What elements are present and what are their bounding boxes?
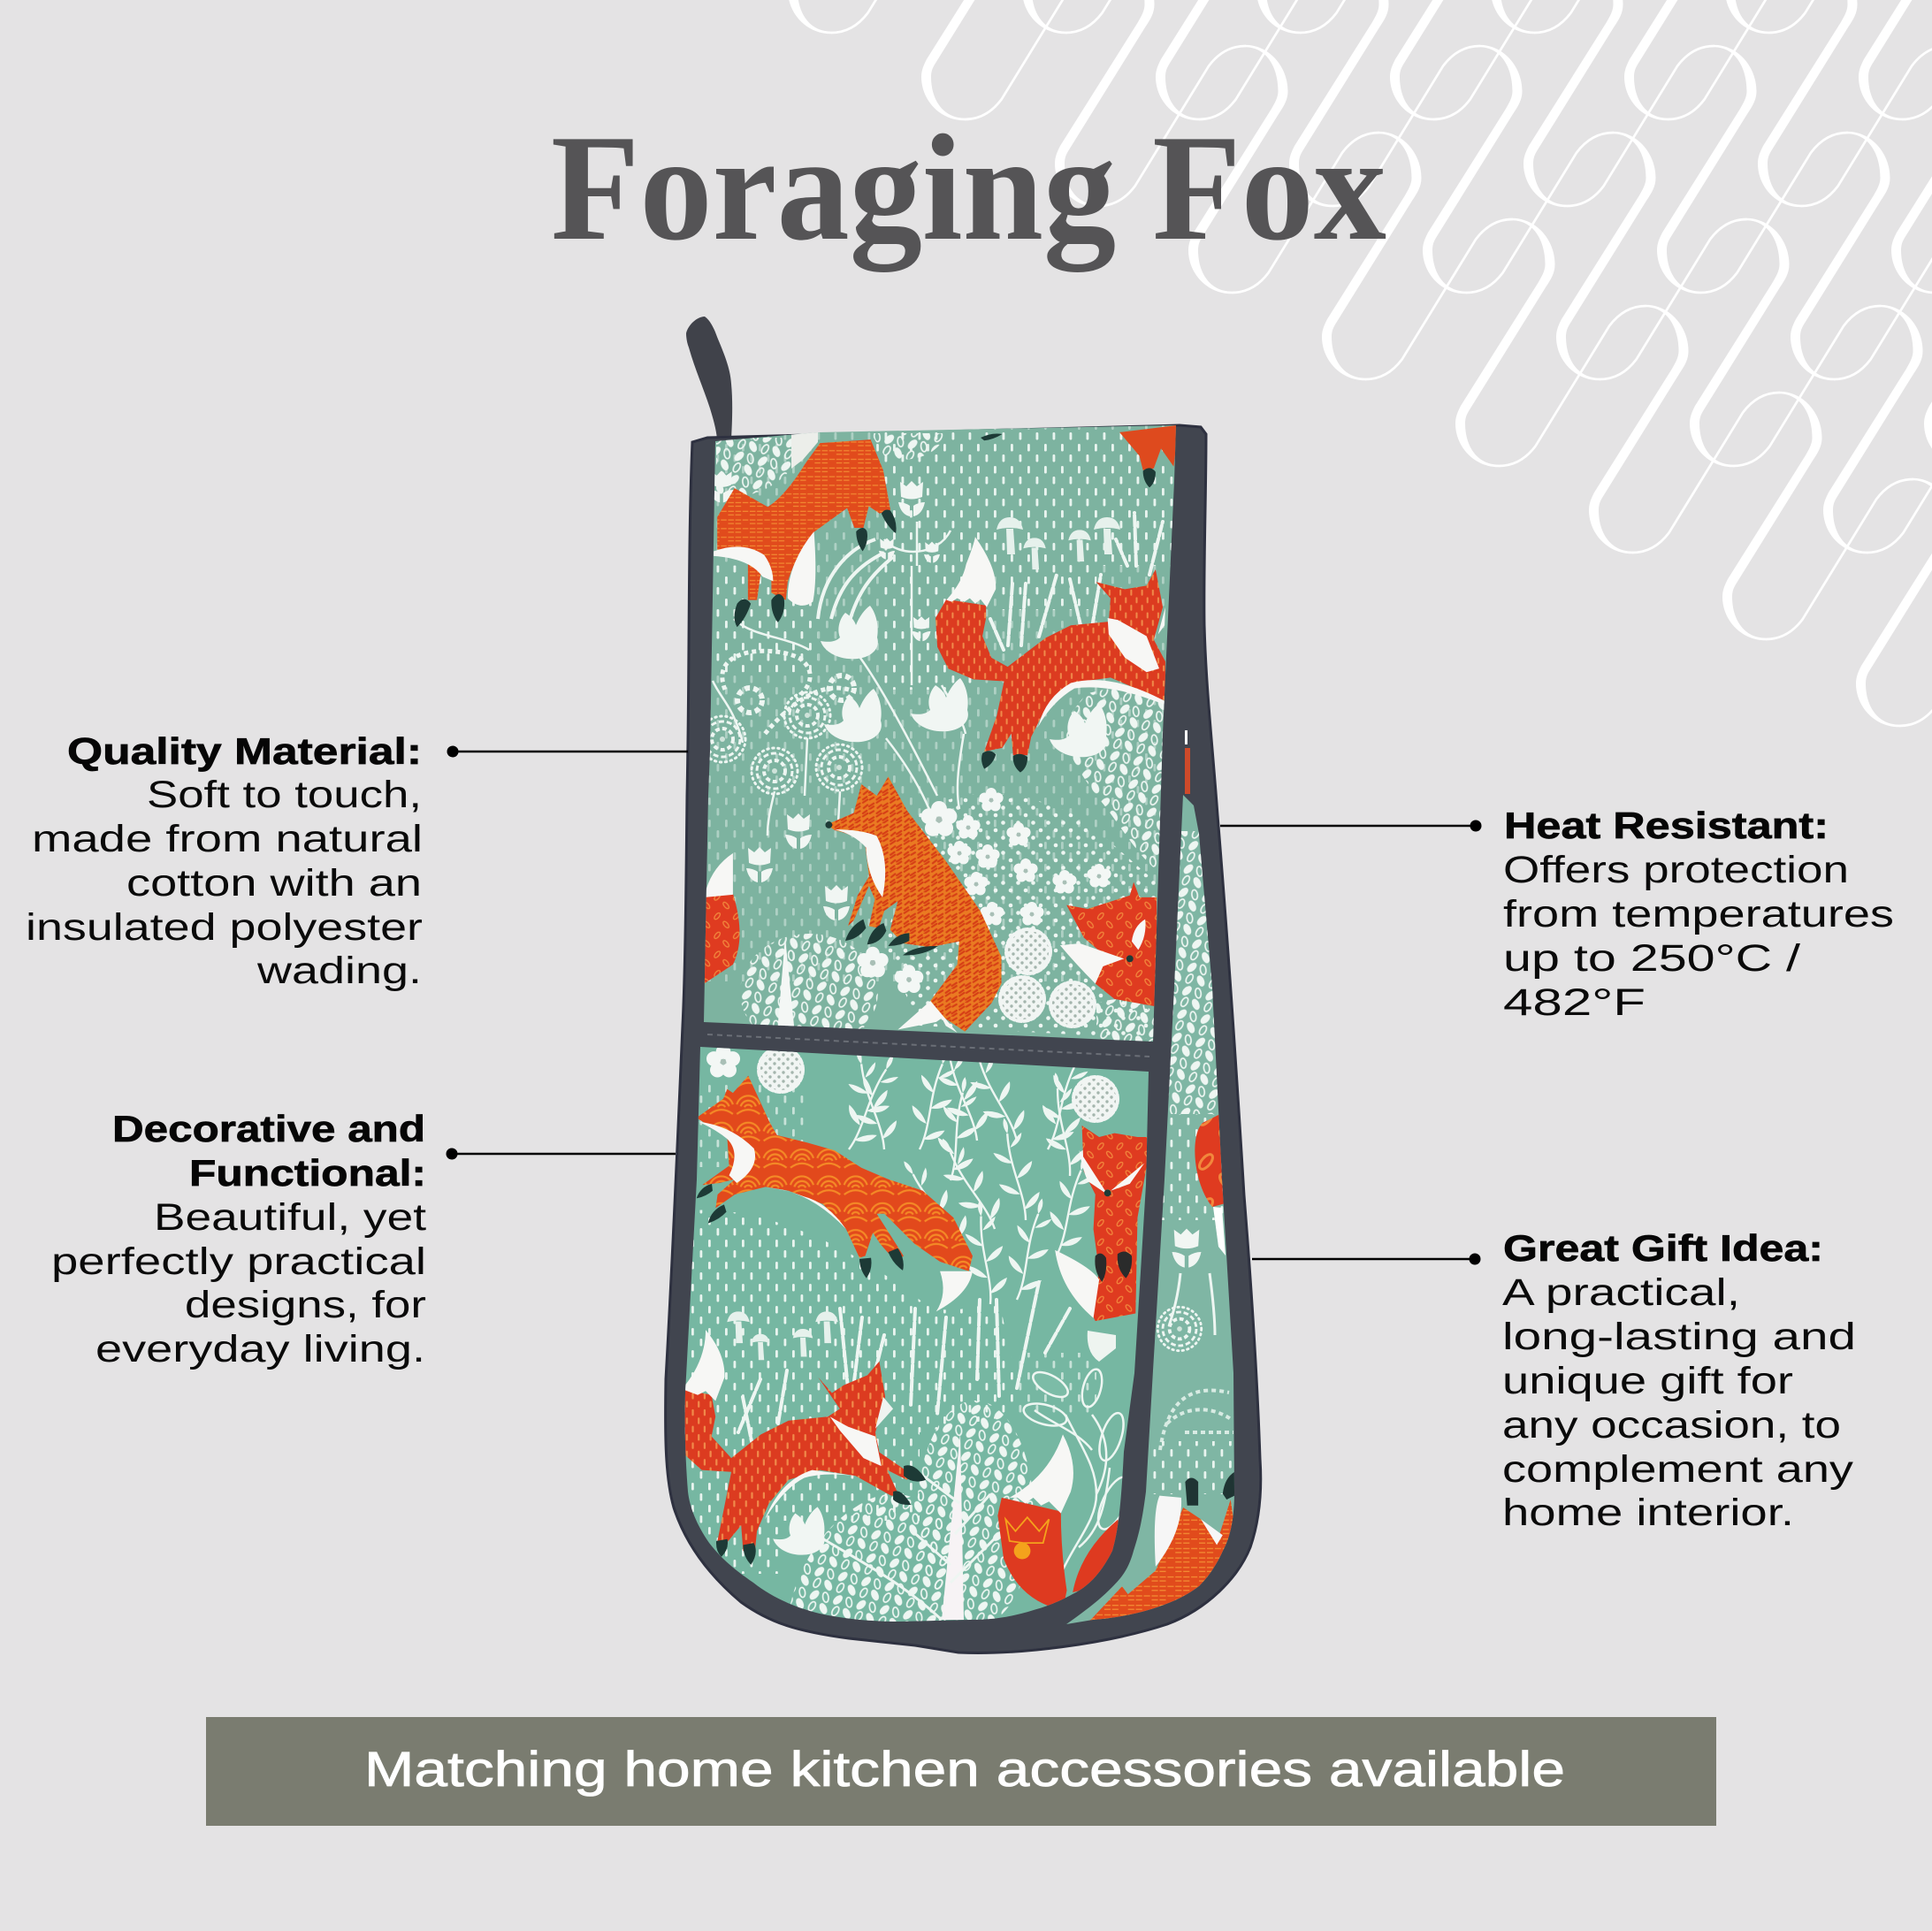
- text block: designs, for: [185, 1284, 426, 1326]
- dot texture behind daisies: [884, 794, 1158, 1039]
- dash texture: upper meadow: [875, 429, 1180, 610]
- background pattern: white paperclip loops: [788, 0, 1932, 727]
- tree: [787, 1401, 1034, 1627]
- stems: [713, 522, 966, 836]
- text block: [1502, 1227, 1856, 1534]
- strip fabric: [1066, 795, 1234, 1624]
- text block: cotton with an: [126, 862, 422, 904]
- leaf cluster bottom right: [871, 433, 1167, 1048]
- text block: any occasion, to: [1502, 1404, 1841, 1446]
- fox: curled asleep: [1060, 882, 1157, 1007]
- tree canopy right: [917, 1401, 1034, 1627]
- callout: heat resistant: [1220, 805, 1894, 1024]
- strip tulip: [1172, 1229, 1201, 1268]
- leader line: [1220, 820, 1482, 831]
- mushrooms lower: [727, 1311, 838, 1360]
- callout: great gift idea: [1252, 1227, 1856, 1534]
- leader line: [446, 1148, 676, 1160]
- upper panel fabric: [690, 416, 1185, 1052]
- title: Foraging Fox: [551, 104, 1386, 272]
- fox: leaping swirl: [697, 1076, 973, 1311]
- pompoms lower: [706, 1044, 1118, 1121]
- strip dashes: [1162, 1114, 1224, 1220]
- stitching on binding: [707, 1034, 1149, 1057]
- text block: home interior.: [1502, 1492, 1794, 1534]
- hanging loop: [686, 317, 732, 439]
- spiky stems: [738, 1282, 1070, 1441]
- tulips: [709, 470, 940, 920]
- strip dandelion: [1157, 1307, 1202, 1351]
- text block: Heat Resistant:: [1504, 805, 1829, 846]
- text block: Great Gift Idea:: [1503, 1227, 1823, 1269]
- text block: complement any: [1502, 1448, 1854, 1491]
- leader line: [1252, 1254, 1480, 1264]
- fox: sitting with leaf pattern: [825, 776, 1001, 1033]
- leader line: [447, 746, 688, 757]
- lower panel fabric: [672, 1043, 1167, 1636]
- foliage: leaf clusters: [1066, 689, 1165, 867]
- fox: running with dashes: [935, 537, 1165, 773]
- leaf cluster top left: [716, 438, 791, 497]
- dash texture: left meadow: [707, 566, 973, 690]
- tree trunk: [942, 1432, 964, 1620]
- pompom flowers: [1000, 929, 1095, 1027]
- dandelions: [699, 692, 862, 794]
- banner background: [206, 1717, 1716, 1826]
- fox: rear panel bottom: [1088, 1472, 1234, 1621]
- callout: quality material: [26, 730, 688, 992]
- strip fox body fragment: [1195, 1114, 1224, 1207]
- white bud: [1088, 1331, 1116, 1362]
- oven glove product: [666, 317, 1261, 1652]
- text block: up to 250°C /: [1503, 937, 1800, 980]
- text block: insulated polyester: [26, 906, 423, 949]
- text block: Soft to touch,: [147, 774, 422, 816]
- dash texture: top left: [699, 1083, 805, 1167]
- lily lower: [773, 1507, 825, 1555]
- text block: everyday living.: [95, 1328, 425, 1370]
- tree trunk: [776, 937, 796, 1043]
- dash texture: meadow: [681, 1210, 1017, 1574]
- text block: unique gift for: [1502, 1360, 1793, 1402]
- dash texture: overall light: [690, 416, 1185, 981]
- text block: [1503, 805, 1894, 1024]
- text block: A practical,: [1502, 1271, 1740, 1314]
- mushrooms: [997, 517, 1120, 569]
- upper panel: [690, 416, 1185, 1052]
- strip scroll: [1160, 1391, 1233, 1450]
- fox: left edge tail: [704, 853, 739, 984]
- banner: [206, 1717, 1716, 1826]
- spiky stems: [990, 513, 1163, 650]
- text block: made from natural: [32, 818, 423, 860]
- fox: vertical right: [1055, 1126, 1147, 1321]
- text block: [26, 730, 423, 992]
- rear panel strip: [1066, 795, 1234, 1624]
- fox: top left with stripes: [714, 439, 897, 627]
- lower panel: [672, 1035, 1167, 1636]
- text block: long-lasting and: [1502, 1316, 1856, 1358]
- text block: Offers protection: [1503, 849, 1849, 891]
- white slit and red fabric edge: [1185, 730, 1190, 794]
- text block: 482°F: [1503, 981, 1646, 1024]
- tree canopy left: [787, 1494, 951, 1627]
- strip leaves: [1169, 831, 1218, 1114]
- lily flowers: [821, 606, 1107, 757]
- callout: decorative and functional: [51, 1108, 676, 1370]
- glove silhouette and binding: [666, 425, 1261, 1652]
- strip lower dashes: [1153, 1441, 1232, 1494]
- vine sprigs: [832, 1035, 1104, 1306]
- strip fox white tail: [1213, 1207, 1226, 1256]
- text block: Decorative and: [112, 1108, 425, 1149]
- text block: from temperatures: [1503, 893, 1894, 935]
- tree branches: [822, 1477, 995, 1620]
- banner text: Matching home kitchen accessories available: [364, 1741, 1565, 1797]
- leaf cluster bottom left: [741, 934, 878, 1029]
- top edge light patches: [791, 429, 818, 469]
- fox: top right edge: [981, 425, 1179, 487]
- text block: wading.: [256, 950, 422, 992]
- text block: Quality Material:: [67, 730, 422, 772]
- text block: Functional:: [189, 1152, 426, 1194]
- strip stems: [1169, 1273, 1215, 1335]
- text block: [51, 1108, 426, 1370]
- dash texture: right of meadow: [1017, 1353, 1096, 1415]
- leaf branch plant bottom right: [1021, 1367, 1136, 1574]
- text block: perfectly practical: [51, 1240, 426, 1283]
- fox: bottom left running: [682, 1330, 926, 1565]
- fox: bottom right tail: [997, 1434, 1120, 1607]
- daisies: [857, 788, 1111, 993]
- text block: Beautiful, yet: [154, 1196, 426, 1239]
